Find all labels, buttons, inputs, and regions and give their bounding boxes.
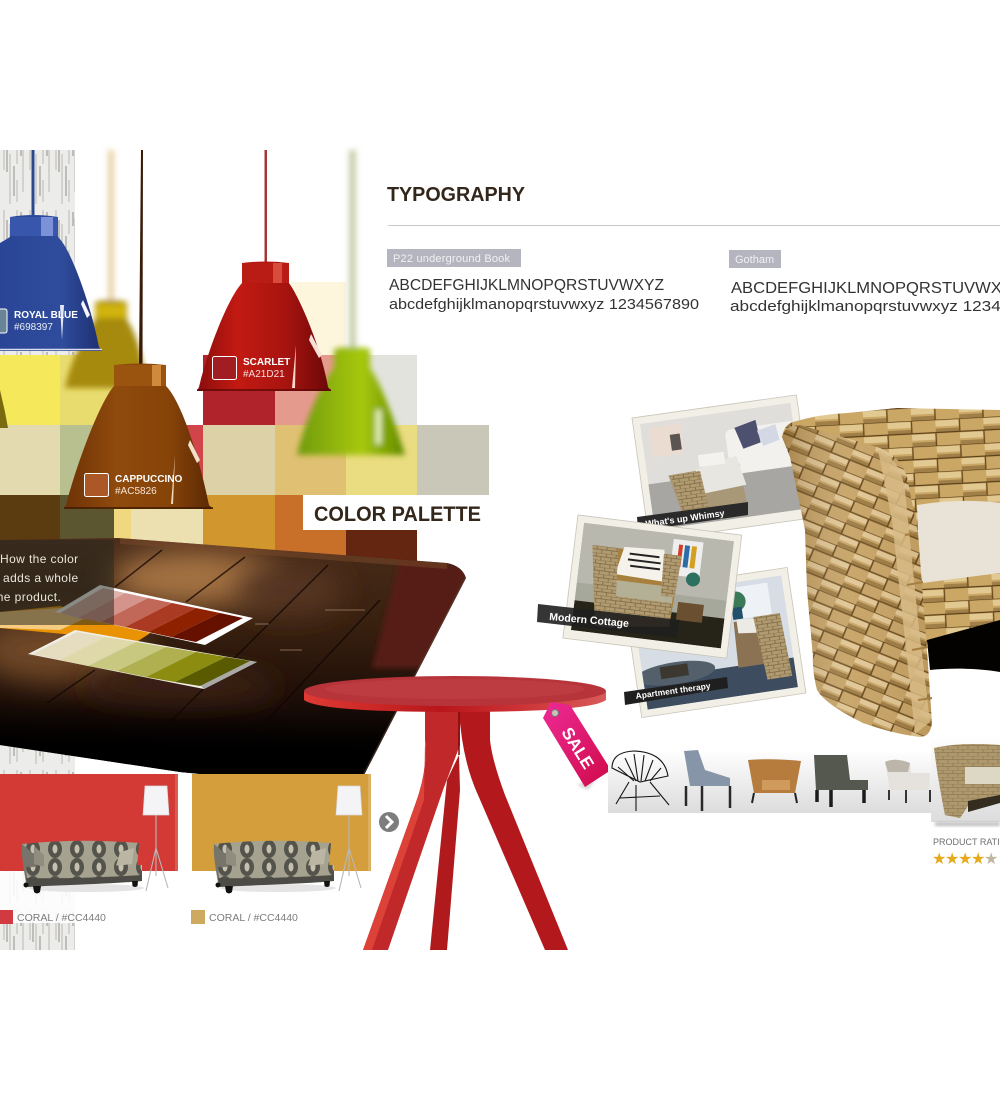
paint swatch card: red	[55, 585, 253, 645]
thumbnail: blue dining chair	[684, 750, 730, 811]
sofa card: coral	[0, 774, 178, 894]
lamp: cappuccino: #AC5826	[115, 486, 157, 497]
barn wood texture: bottom	[0, 745, 75, 950]
font specimen: P22 Underground: P22 underground Book	[393, 253, 510, 265]
thumbnail: gray quilted chair	[814, 755, 868, 807]
sale tag: SALE	[558, 724, 598, 773]
caption: Modern Cottage: Modern Cottage	[549, 611, 630, 630]
lamp: cappuccino	[64, 150, 213, 509]
translucent caption panel	[0, 540, 114, 625]
caption: What's up Whimsy: What's up Whimsy	[645, 508, 725, 529]
lamp: cappuccino: CAPPUCCINO	[115, 474, 182, 485]
photo: Apartment therapy	[623, 567, 806, 718]
caption: Modern Cottage	[537, 604, 680, 638]
lamp: royal blue: ROYAL BLUE	[14, 310, 78, 321]
sofa card: gold	[192, 774, 371, 894]
font specimen: P22 Underground	[387, 249, 699, 313]
color legend: coral: CORAL / #CC4440	[17, 912, 106, 924]
product rating: ★	[984, 849, 998, 868]
product rating: ★	[945, 849, 959, 868]
next arrow button	[379, 812, 399, 832]
font specimen: Gotham	[729, 250, 1000, 315]
caption: Apartment therapy: Apartment therapy	[635, 681, 711, 701]
font specimen: P22 Underground: ABCDEFGHIJKLMNOPQRSTUVWXYZ	[389, 277, 664, 294]
lamp: scarlet: SCARLET	[243, 357, 290, 368]
font specimen: Gotham: Gotham	[735, 254, 774, 266]
paint swatch card: green	[28, 630, 257, 689]
label: color palette: COLOR PALETTE	[314, 503, 481, 526]
translucent caption panel: How the color	[0, 552, 79, 566]
font specimen: P22 Underground: abcdefghijklmanopqrstuvwxyz 1234567890	[389, 296, 699, 313]
photo: Modern Cottage	[563, 515, 742, 658]
thumbnail: tan leather chair	[748, 759, 801, 803]
translucent caption panel: adds a whole	[3, 571, 79, 585]
selected chair thumbnail	[931, 735, 1000, 826]
label: color palette	[303, 495, 489, 530]
product rating: ★	[932, 849, 946, 868]
product rating: ★	[971, 849, 985, 868]
typography divider	[388, 225, 1000, 226]
paint swatch card: orange	[0, 606, 152, 641]
lamp: scarlet: #A21D21	[243, 369, 285, 380]
lamp: blurred yellow	[65, 150, 147, 388]
chair thumbnail strip	[608, 750, 931, 813]
photo: What's up Whimsy	[632, 394, 803, 532]
caption: Apartment therapy	[624, 677, 728, 705]
lamp: royal blue	[0, 150, 102, 351]
product rating: ★	[958, 849, 972, 868]
caption: What's up Whimsy	[637, 502, 748, 531]
wicker armchair	[782, 408, 1000, 737]
infographic canvas	[0, 147, 1000, 950]
wooden table with paint swatches	[0, 538, 466, 774]
lamp: blurred green	[297, 150, 405, 455]
lamp: royal blue: #698397	[14, 322, 53, 333]
sale tag	[543, 702, 616, 790]
red round side table	[304, 676, 606, 950]
lamp: scarlet	[197, 150, 331, 391]
color palette mosaic	[0, 282, 489, 565]
heading: typography: TYPOGRAPHY	[387, 184, 526, 206]
product rating	[932, 837, 1000, 868]
thumbnail: white tufted chair	[885, 760, 930, 803]
white fade under sofa on barn wood	[0, 871, 75, 923]
color legend: gold: CORAL / #CC4440	[209, 912, 298, 924]
lamp: olive stub	[0, 390, 8, 428]
barn wood texture: top	[0, 150, 75, 355]
